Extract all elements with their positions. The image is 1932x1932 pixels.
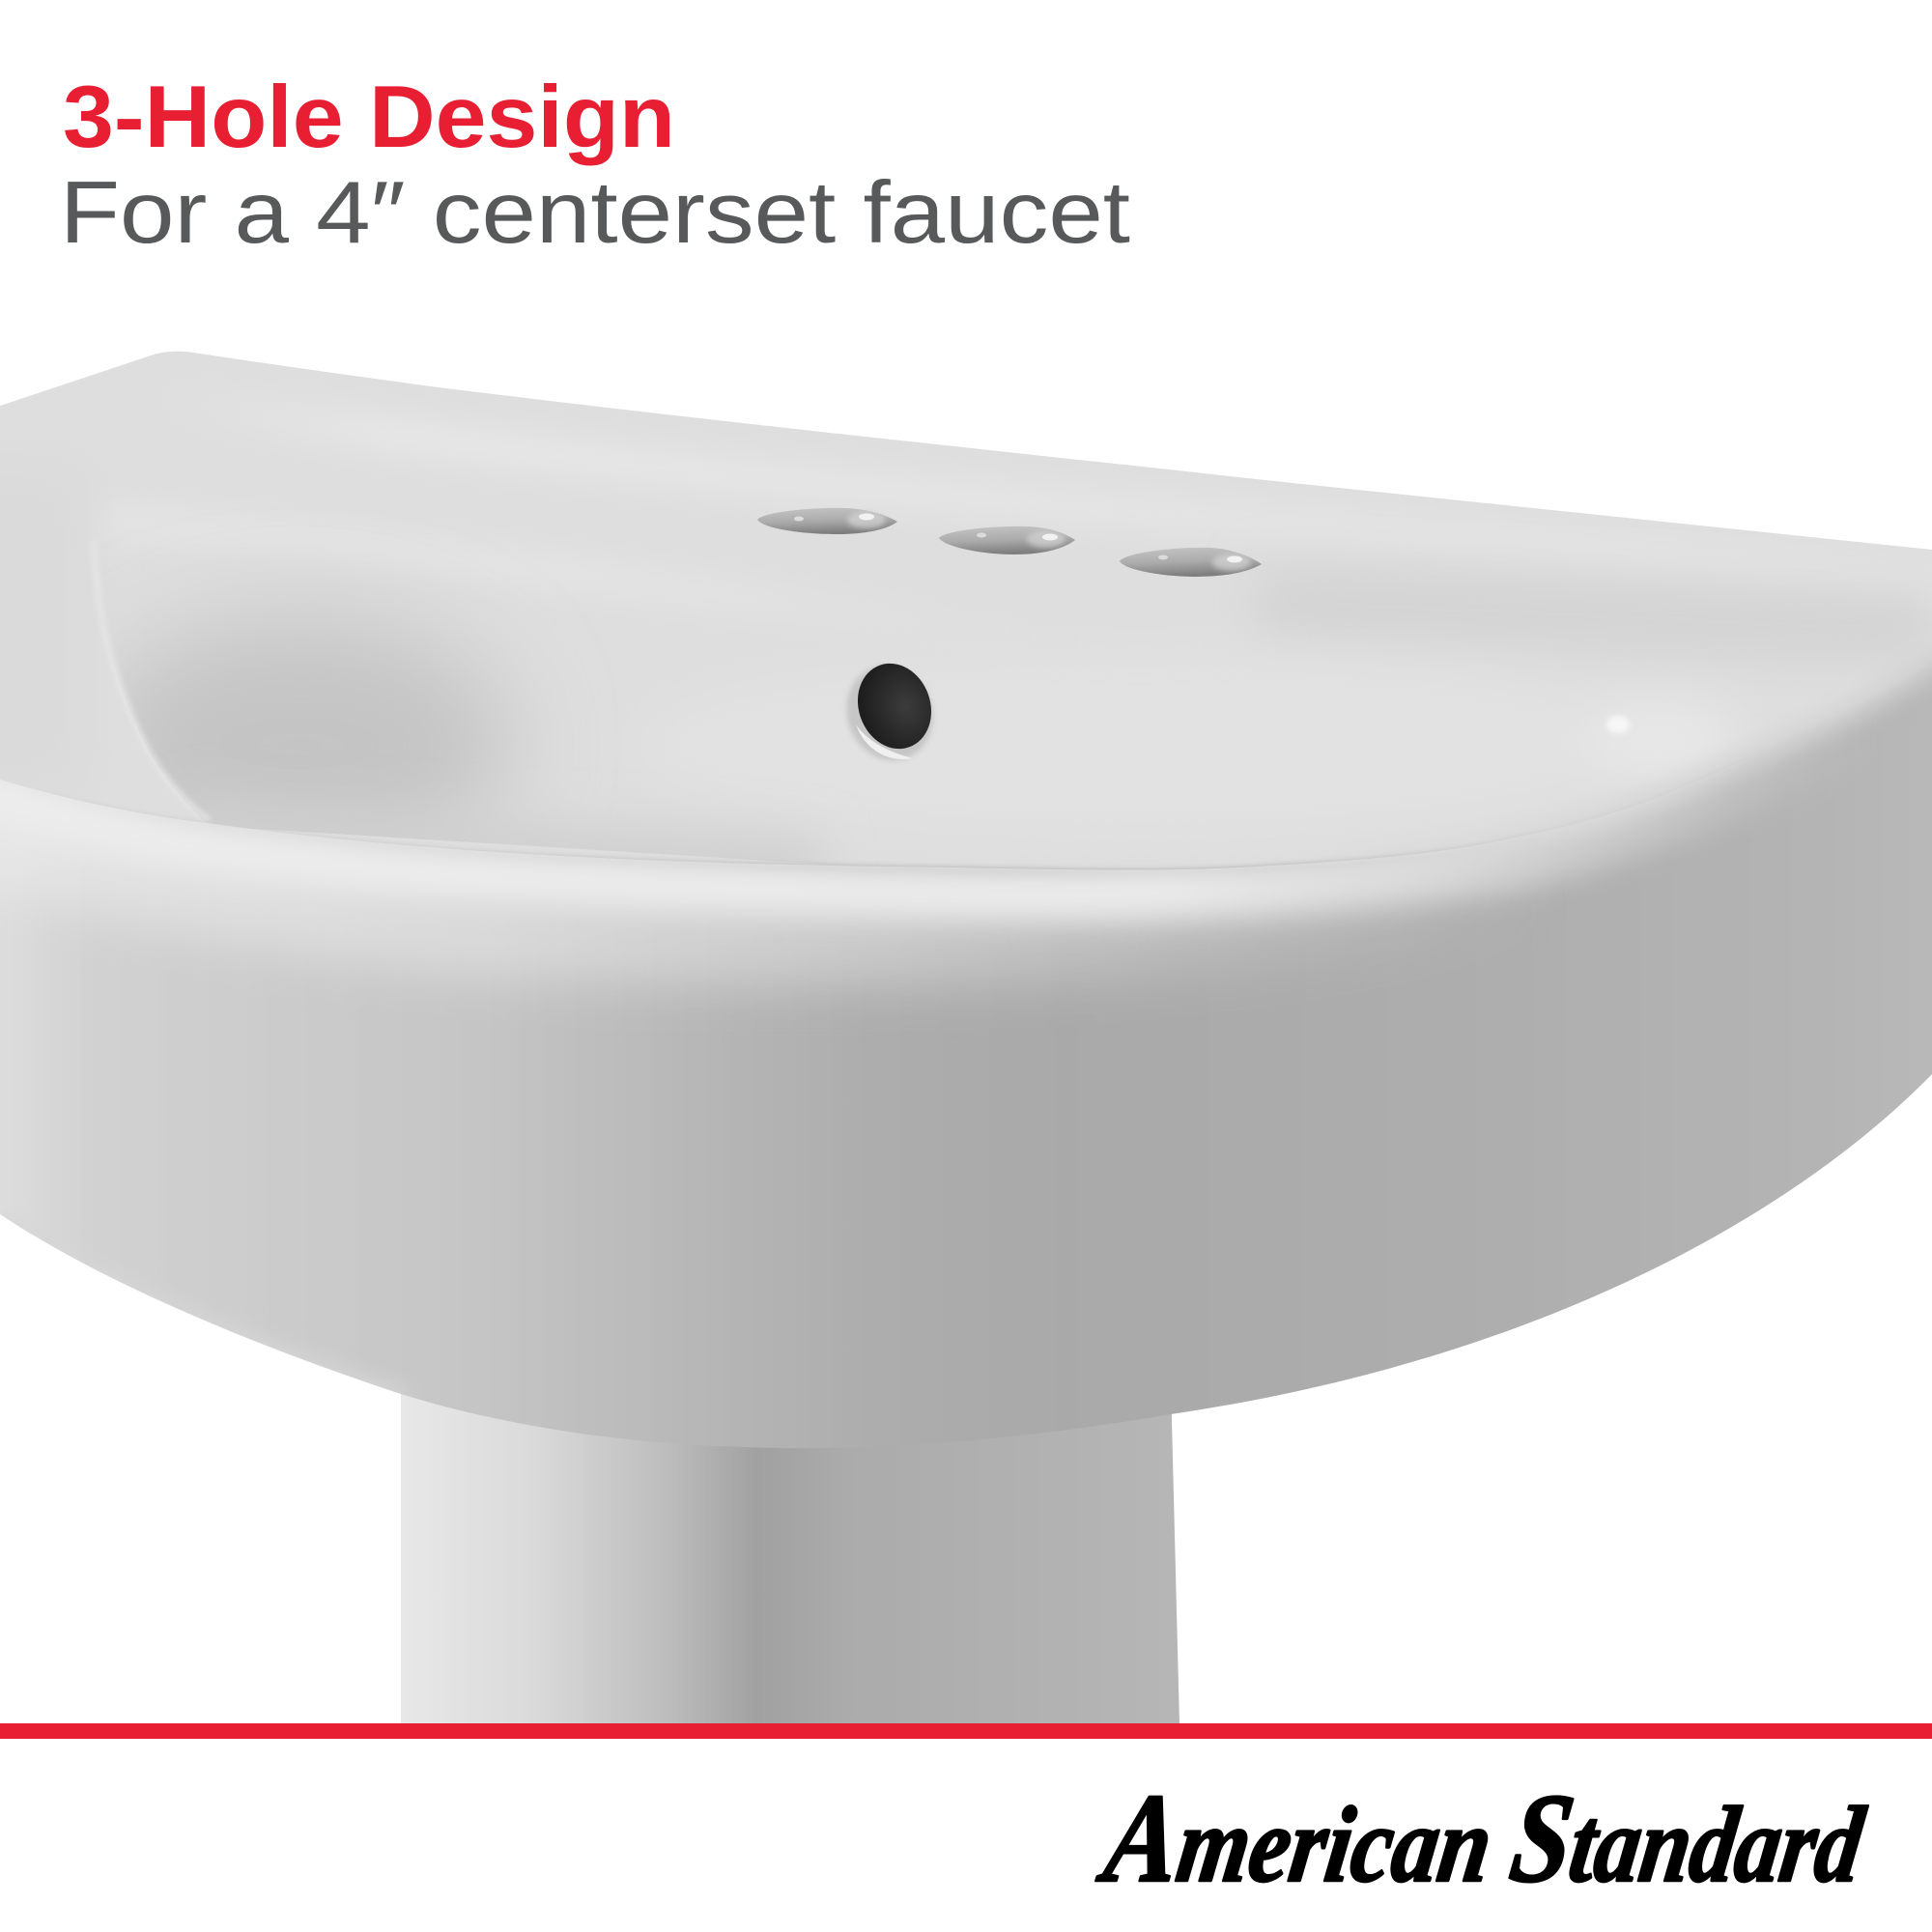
bright crest band: [0, 771, 1779, 934]
overflow drain: [834, 653, 946, 773]
drain plug: [846, 653, 943, 759]
basin left crease: [107, 639, 211, 821]
logo: American Standard: [1092, 1768, 1874, 1909]
basin shadow with crease edge: [87, 618, 821, 869]
sink basin: [0, 328, 1932, 1546]
deck surface: [0, 352, 1932, 869]
faucet hole 1: [757, 508, 897, 534]
deck shadow band: [1256, 604, 1932, 628]
right rim glow: [1648, 724, 1695, 753]
outer bowl face: [0, 659, 1932, 1448]
right crest soft edge: [1439, 665, 1932, 854]
subheading: For a 4″ centerset faucet: [60, 164, 1130, 262]
lower edge light: [359, 1379, 392, 1391]
pedestal: [401, 1381, 1179, 1724]
wide soft light: [0, 831, 1594, 940]
headline: 3-Hole Design: [63, 69, 675, 166]
drain ceramic ring: [834, 653, 946, 773]
logo: American Standard: Standard: [1503, 1768, 1874, 1909]
faucet hole 2: [939, 526, 1075, 554]
ledge light band above basin: [106, 522, 1159, 657]
red divider line: [0, 1723, 1932, 1739]
logo: American Standard: American: [1092, 1768, 1502, 1909]
rim highlight band: [97, 386, 1932, 589]
basin bright area: [638, 657, 1642, 831]
deck left area: [0, 464, 87, 792]
crest light band: [0, 771, 1779, 997]
specular highlight: [1606, 716, 1630, 733]
faucet hole 3: [1120, 548, 1262, 577]
